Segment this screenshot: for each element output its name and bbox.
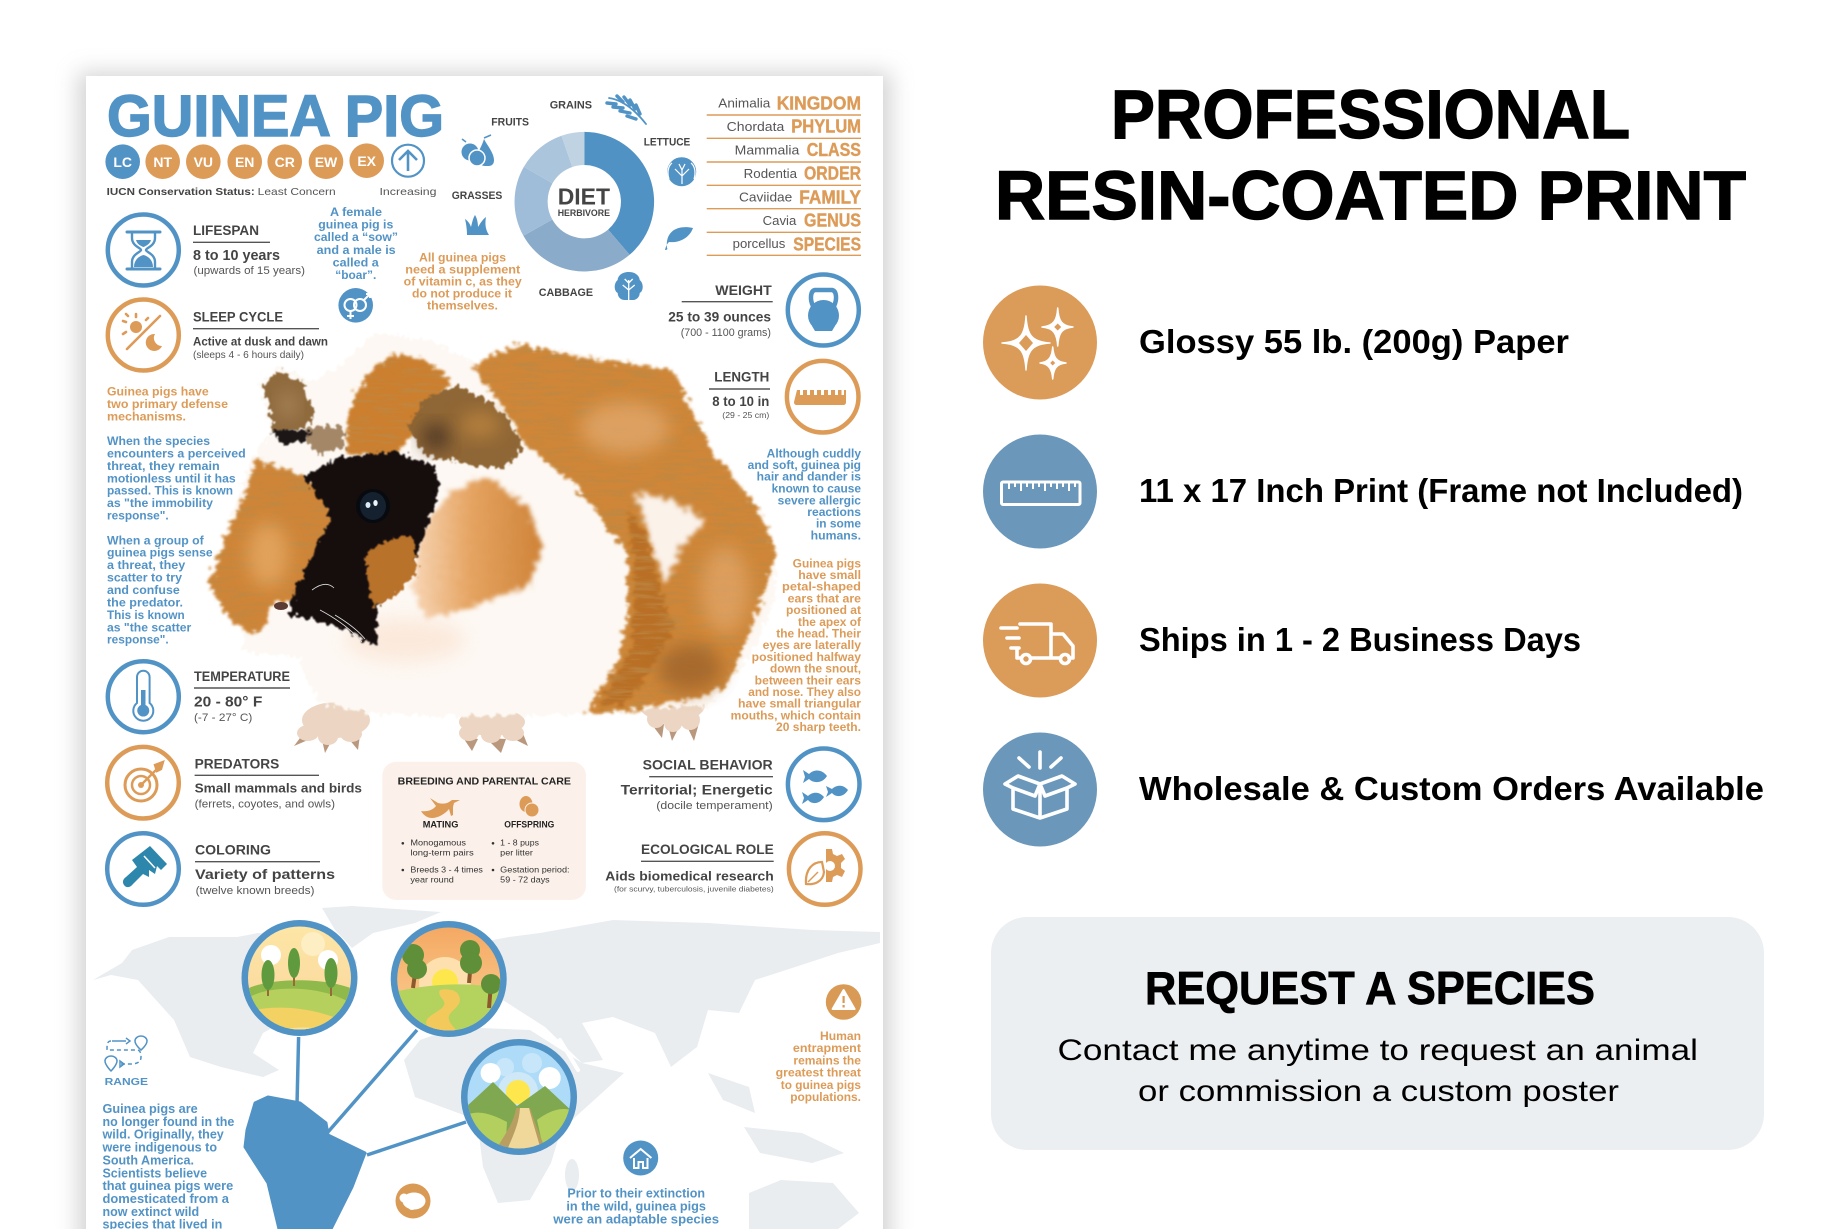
taxonomy ranks — [777, 93, 861, 254]
icon: gear and leaf — [789, 833, 860, 905]
panel heading: REQUEST A SPECIES — [1145, 962, 1595, 1014]
belly warm tint — [345, 618, 465, 662]
taxonomy table — [707, 93, 861, 255]
text block: anatomy: have small — [798, 568, 861, 582]
icon: ruler — [983, 434, 1097, 548]
text block: anatomy: the apex of — [798, 615, 861, 629]
black face mask — [291, 453, 437, 643]
text block: habitat: in the wild, guinea pigs — [566, 1200, 706, 1214]
icon: offspring eggs — [520, 796, 539, 817]
text block: allergies: in some — [816, 517, 861, 531]
left ear — [263, 370, 316, 433]
icon: cabbage — [615, 272, 643, 300]
text block: range: were indigenous to — [101, 1141, 217, 1155]
offspring bullets: per litter — [500, 848, 533, 858]
conservation status badges: CR — [275, 154, 295, 170]
taxonomy names — [718, 97, 799, 251]
note: (sleeps 4 - 6 hours daily) — [193, 350, 304, 361]
text block: sow and boar: called a — [333, 255, 379, 269]
cheek orange patch — [366, 533, 417, 607]
text block: anatomy: have small triangular — [738, 697, 861, 711]
stat: ecological role — [605, 833, 860, 905]
panel heading: BREEDING AND PARENTAL CARE — [398, 775, 571, 787]
text block: allergies: severe allergic — [778, 493, 861, 507]
text block: allergies: humans. — [811, 528, 861, 542]
panel: breeding and parental care — [382, 762, 586, 900]
text block: habitat — [552, 1187, 719, 1227]
rear flank highlight — [701, 546, 749, 634]
text block: defense intro: two primary defense — [107, 397, 228, 411]
note: (29 - 25 cm) — [722, 410, 769, 420]
feature: wholesale — [983, 732, 1764, 846]
rear dark band — [599, 507, 674, 707]
text block: scatter response: guinea pigs sense — [107, 546, 213, 560]
food labels: FRUITS — [491, 117, 529, 129]
note: (700 - 1100 grams) — [681, 327, 771, 339]
mating bullets: long-term pairs — [410, 848, 474, 858]
note: (twelve known breeds) — [196, 885, 314, 897]
text block: anatomy: between their ears — [755, 673, 861, 687]
value: 20 - 80° F — [194, 695, 262, 711]
stat: temperature — [108, 661, 290, 732]
black patch under ear — [271, 430, 310, 445]
text block: immobility response: response". — [107, 509, 169, 523]
icon: hourglass — [108, 214, 179, 286]
value: 8 to 10 years — [193, 248, 280, 264]
range label: RANGE — [105, 1076, 148, 1088]
taxonomy names: Mammalia — [735, 144, 799, 158]
stat: coloring — [107, 833, 335, 905]
habitat scene: river valley — [391, 921, 507, 1042]
panel background — [991, 917, 1764, 1150]
text block: threats — [776, 1029, 861, 1104]
feature: shipping — [983, 584, 1581, 698]
food labels — [452, 99, 690, 299]
taxonomy names: Caviidae — [739, 190, 792, 204]
text block: vitamin c: of vitamin c, as they — [404, 275, 522, 289]
face orange patch — [212, 462, 340, 632]
text block: sow and boar: “boar”. — [335, 268, 376, 282]
text block: anatomy: ears that are — [788, 591, 861, 605]
icon: ruler — [787, 361, 858, 433]
text block: range: Guinea pigs are — [102, 1102, 198, 1116]
taxonomy names: Animalia — [718, 97, 770, 111]
right ear — [409, 388, 521, 467]
conservation status badges: EN — [235, 154, 254, 170]
text block: sow and boar — [314, 205, 398, 282]
column label: offspring: OFFSPRING — [504, 819, 554, 830]
icon: grain — [607, 96, 646, 124]
text block: sow and boar: called a “sow” — [314, 230, 398, 244]
text block: scatter response: as "the scatter — [107, 620, 192, 634]
text block: allergies — [748, 446, 861, 542]
heading: PREDATORS — [195, 756, 279, 771]
snout highlight — [248, 523, 288, 587]
stat: sleep cycle — [108, 300, 328, 370]
panel title: PROFESSIONAL — [1111, 76, 1630, 153]
food labels: CABBAGE — [539, 287, 593, 299]
text block: immobility response: threat, they remain — [107, 459, 220, 473]
head top orange patch — [350, 357, 449, 455]
feature text: 11 x 17 Inch Print (Frame not Included) — [1139, 472, 1743, 509]
text block: anatomy: petal-shaped — [782, 580, 861, 594]
value: 8 to 10 in — [712, 393, 769, 409]
conservation status badges — [105, 143, 384, 179]
taxonomy ranks: CLASS — [807, 140, 861, 160]
note: (upwards of 15 years) — [194, 265, 305, 277]
taxonomy ranks: ORDER — [804, 164, 861, 184]
taxonomy ranks: FAMILY — [799, 187, 861, 207]
text block: anatomy: down the snout, — [770, 662, 861, 676]
poster drop shadow — [78, 72, 891, 1229]
value: Variety of patterns — [195, 866, 335, 882]
panel text line 2: or commission a custom poster — [1138, 1075, 1619, 1108]
mating bullets: Monogamous — [410, 838, 466, 848]
text block: range: domesticated from a — [102, 1192, 230, 1206]
text block: scatter response: This is known — [107, 608, 185, 622]
conservation status badges: EX — [357, 153, 377, 169]
rear fur patch — [476, 347, 773, 710]
taxonomy ranks: SPECIES — [793, 234, 861, 254]
column label: mating: MATING — [423, 819, 458, 830]
text block: vitamin c: need a supplement — [405, 263, 520, 277]
icon: fruits — [462, 135, 494, 166]
text block: threats: greatest threat — [776, 1066, 861, 1080]
text block: allergies: reactions — [807, 505, 861, 519]
taxonomy names: Rodentia — [744, 167, 797, 181]
text block: scatter response: and confuse — [107, 583, 180, 597]
title: GUINEA PIG — [107, 84, 444, 149]
text block: threats: populations. — [790, 1090, 861, 1104]
text block: vitamin c: All guinea pigs — [419, 251, 506, 265]
icon: fish school — [788, 748, 860, 820]
icon: guinea pig silhouette — [396, 1184, 430, 1218]
panel background — [382, 762, 586, 900]
text block: anatomy: 20 sharp teeth. — [776, 720, 861, 734]
guinea pig illustration — [212, 335, 773, 753]
note: (ferrets, coyotes, and owls) — [195, 798, 335, 810]
conservation status badges: VU — [194, 154, 213, 170]
note: (docile temperament) — [656, 800, 773, 812]
rear white patch — [635, 493, 706, 585]
whiskers — [312, 584, 365, 642]
text block: defense intro: mechanisms. — [107, 409, 186, 423]
text block: scatter response: a threat, they — [107, 558, 186, 572]
taxonomy names: porcellus — [733, 237, 785, 251]
note: (-7 - 27° C) — [194, 712, 252, 724]
icon: warning — [826, 984, 861, 1020]
text block: range: now extinct wild — [102, 1205, 199, 1219]
food labels: GRASSES — [452, 190, 502, 202]
taxonomy rules — [707, 115, 861, 255]
status value: Least Concern — [258, 186, 336, 198]
text block: scatter response: When a group of — [107, 533, 205, 547]
nose — [274, 602, 288, 610]
text block: range: no longer found in the — [102, 1115, 234, 1129]
heading: SOCIAL BEHAVIOR — [643, 757, 773, 772]
text block: allergies: Although cuddly — [767, 446, 861, 460]
eye — [356, 489, 390, 523]
rear fur highlight — [581, 402, 669, 454]
panel: request a species — [991, 917, 1764, 1150]
feature text: Wholesale & Custom Orders Available — [1139, 770, 1764, 807]
heading: SLEEP CYCLE — [193, 310, 283, 325]
status caption: IUCN Conservation Status: — [107, 186, 255, 198]
icon: population trend arrow — [392, 145, 424, 177]
left ear inner — [279, 391, 297, 419]
value: 25 to 39 ounces — [668, 309, 771, 325]
text block: range: Scientists believe — [102, 1166, 207, 1180]
note: (for scurvy, tuberculosis, juvenile diabetes) — [614, 885, 774, 894]
world map — [93, 906, 880, 1229]
text block: immobility response: passed. This is known — [107, 484, 233, 498]
text block: anatomy: mouths, which contain — [731, 708, 861, 722]
heading: LENGTH — [714, 370, 769, 385]
icon: delivery truck — [983, 584, 1097, 698]
right ear streak — [460, 412, 500, 438]
text block: range: wild. Originally, they — [101, 1128, 224, 1142]
donut chart — [515, 132, 654, 271]
text block: vitamin c — [404, 251, 522, 313]
offspring bullets: Gestation period: — [500, 865, 570, 875]
food labels: LETTUCE — [644, 137, 690, 149]
text block: threats: entrapment — [793, 1041, 861, 1055]
conservation status badges: NT — [153, 154, 172, 170]
text block: defense intro: Guinea pigs have — [107, 385, 209, 399]
text block: immobility response: When the species — [107, 434, 210, 448]
feature: size — [983, 434, 1743, 548]
header: title and conservation status — [105, 84, 444, 198]
body base — [212, 335, 773, 713]
text block: range: South America. — [102, 1153, 194, 1167]
icon: leaf — [665, 227, 693, 250]
feature: paper — [983, 286, 1569, 400]
text block: immobility response: motionless until it has — [107, 471, 236, 485]
text block: allergies: hair and dander is — [757, 470, 861, 484]
icon: range route — [105, 1036, 147, 1071]
icon: house — [623, 1140, 658, 1176]
icon: sparkles — [983, 286, 1097, 400]
conservation status badges: LC — [113, 154, 132, 170]
inland seas — [558, 1038, 580, 1072]
text block: anatomy: eyes are laterally — [763, 638, 861, 652]
icon: target — [107, 747, 179, 818]
centre sublabel: HERBIVORE — [558, 208, 610, 219]
text block: habitat: were an adaptable species — [552, 1213, 719, 1227]
feet — [294, 688, 705, 753]
heading: TEMPERATURE — [194, 669, 290, 684]
heading: ECOLOGICAL ROLE — [641, 842, 774, 857]
icon: stork — [421, 798, 460, 818]
text block: allergies: and soft, guinea pig — [748, 458, 861, 472]
text block: anatomy — [731, 556, 861, 734]
text block: scatter response — [107, 533, 213, 647]
panel title — [995, 76, 1746, 234]
range section — [93, 906, 880, 1229]
value: Small mammals and birds — [195, 782, 362, 796]
icon: gender symbols — [338, 288, 373, 323]
text block: sow and boar: A female — [330, 205, 382, 219]
trend caption: Increasing — [380, 186, 437, 198]
text block: anatomy: the head. Their — [776, 626, 861, 640]
text block: scatter response: response". — [107, 633, 169, 647]
text block: immobility response — [107, 434, 246, 523]
midsection orange patch — [412, 476, 542, 618]
stat: social behavior — [621, 748, 860, 820]
diet chart — [452, 96, 696, 300]
habitat scene: grassland — [242, 920, 358, 1040]
icon: thermometer — [108, 661, 179, 732]
mating bullets: year round — [410, 874, 454, 884]
text block: anatomy: positioned halfway — [752, 650, 861, 664]
heading: WEIGHT — [715, 283, 772, 298]
text block: immobility response: encounters a perceived — [107, 446, 246, 460]
value: Territorial; Energetic — [621, 781, 773, 797]
taxonomy names: Cavia — [763, 214, 796, 228]
offspring bullets: 1 - 8 pups — [500, 838, 539, 848]
conservation status badges: EW — [315, 154, 338, 170]
icon: lettuce — [667, 157, 696, 186]
text block: immobility response: as "the immobility — [107, 496, 213, 510]
stat: predators — [107, 747, 362, 818]
text block: vitamin c: do not produce it — [412, 287, 512, 301]
text block: scatter response: the predator. — [107, 596, 183, 610]
stat: length — [709, 361, 858, 433]
offspring bullets — [492, 838, 570, 884]
feature text: Glossy 55 lb. (200g) Paper — [1139, 323, 1569, 360]
south america highlight — [245, 1097, 365, 1229]
connector lines — [297, 1030, 466, 1155]
food labels: GRAINS — [550, 99, 592, 111]
icon: kettlebell — [788, 274, 859, 346]
right ear inner — [422, 424, 450, 450]
taxonomy names: Chordata — [727, 120, 784, 134]
text block: habitat: Prior to their extinction — [567, 1187, 705, 1201]
text block: threats: Human — [820, 1029, 861, 1043]
text block: sow and boar: and a male is — [317, 243, 396, 257]
value: Aids biomedical research — [605, 870, 774, 884]
text block: anatomy: positioned at — [786, 603, 861, 617]
text block: anatomy: Guinea pigs — [793, 556, 861, 570]
panel title: RESIN-COATED PRINT — [995, 157, 1746, 234]
stat: lifespan — [108, 214, 305, 286]
poster sheet — [86, 76, 883, 1229]
text block: scatter response: scatter to try — [107, 571, 182, 585]
offspring bullets: 59 - 72 days — [500, 874, 550, 884]
feature text: Ships in 1 - 2 Business Days — [1139, 621, 1581, 658]
text block: range: that guinea pigs were — [102, 1179, 233, 1193]
icon: paint brush — [107, 833, 179, 905]
text block: vitamin c: themselves. — [427, 299, 498, 313]
stat: weight — [668, 274, 859, 346]
text block: threats: to guinea pigs — [781, 1078, 861, 1092]
mating bullets: Breeds 3 - 4 times — [410, 865, 483, 875]
centre label: DIET — [558, 183, 610, 209]
heading: COLORING — [195, 842, 271, 857]
brown forehead mottling — [305, 425, 345, 455]
mating bullets — [402, 838, 483, 884]
taxonomy ranks: PHYLUM — [791, 117, 861, 137]
icon: open box — [983, 732, 1097, 846]
taxonomy ranks: GENUS — [804, 211, 861, 231]
value: Active at dusk and dawn — [193, 336, 328, 348]
text block: anatomy: and nose. They also — [748, 685, 861, 699]
habitat scene: mountain road — [461, 1039, 577, 1156]
text block: range — [101, 1102, 234, 1229]
heading: LIFESPAN — [193, 223, 259, 238]
text block: threats: remains the — [793, 1054, 861, 1068]
panel text: Contact me anytime to request an animal — [1058, 1034, 1698, 1067]
text block: defense intro — [107, 385, 228, 423]
rear lower shadow — [658, 644, 722, 692]
taxonomy ranks: KINGDOM — [777, 93, 861, 113]
text block: sow and boar: guinea pig is — [318, 218, 394, 232]
text block: allergies: known to cause — [772, 482, 861, 496]
icon: sun and moon — [108, 300, 179, 370]
icon: grasses — [465, 215, 489, 235]
